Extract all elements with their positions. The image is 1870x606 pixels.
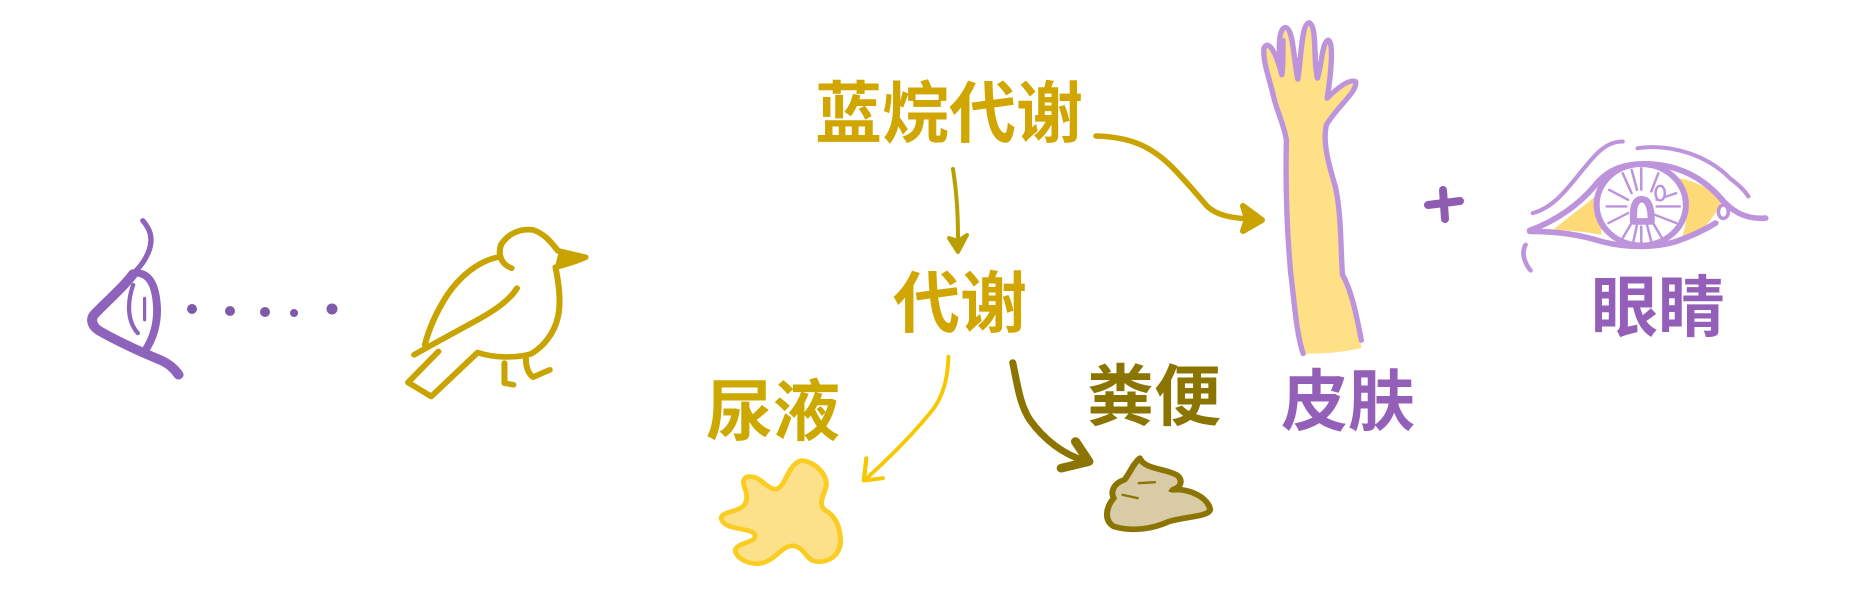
- arrow: to feces: [1013, 363, 1089, 468]
- label: 尿液: 尿液: [706, 375, 840, 450]
- arrow: to urine: [864, 357, 948, 481]
- plus sign: [1428, 190, 1460, 219]
- label: 粪便: 粪便: [1087, 360, 1221, 435]
- arrow: to skin: [1096, 136, 1262, 231]
- arrow: metabolism down: [949, 169, 967, 252]
- icon: human eye: [1523, 142, 1766, 270]
- dotted line of sight: [187, 304, 338, 317]
- icon: arm with yellow skin: [1264, 23, 1361, 354]
- icon: bird outline: [408, 230, 586, 396]
- icon: urine puddle: [721, 461, 841, 564]
- label: 代谢: 代谢: [893, 267, 1027, 342]
- label: 皮肤: 皮肤: [1281, 365, 1415, 440]
- label: 眼睛: 眼睛: [1591, 271, 1725, 346]
- label: 蓝烷代谢: 蓝烷代谢: [815, 77, 1083, 152]
- icon: side-view eye: [92, 221, 179, 375]
- icon: feces pile: [1107, 458, 1210, 529]
